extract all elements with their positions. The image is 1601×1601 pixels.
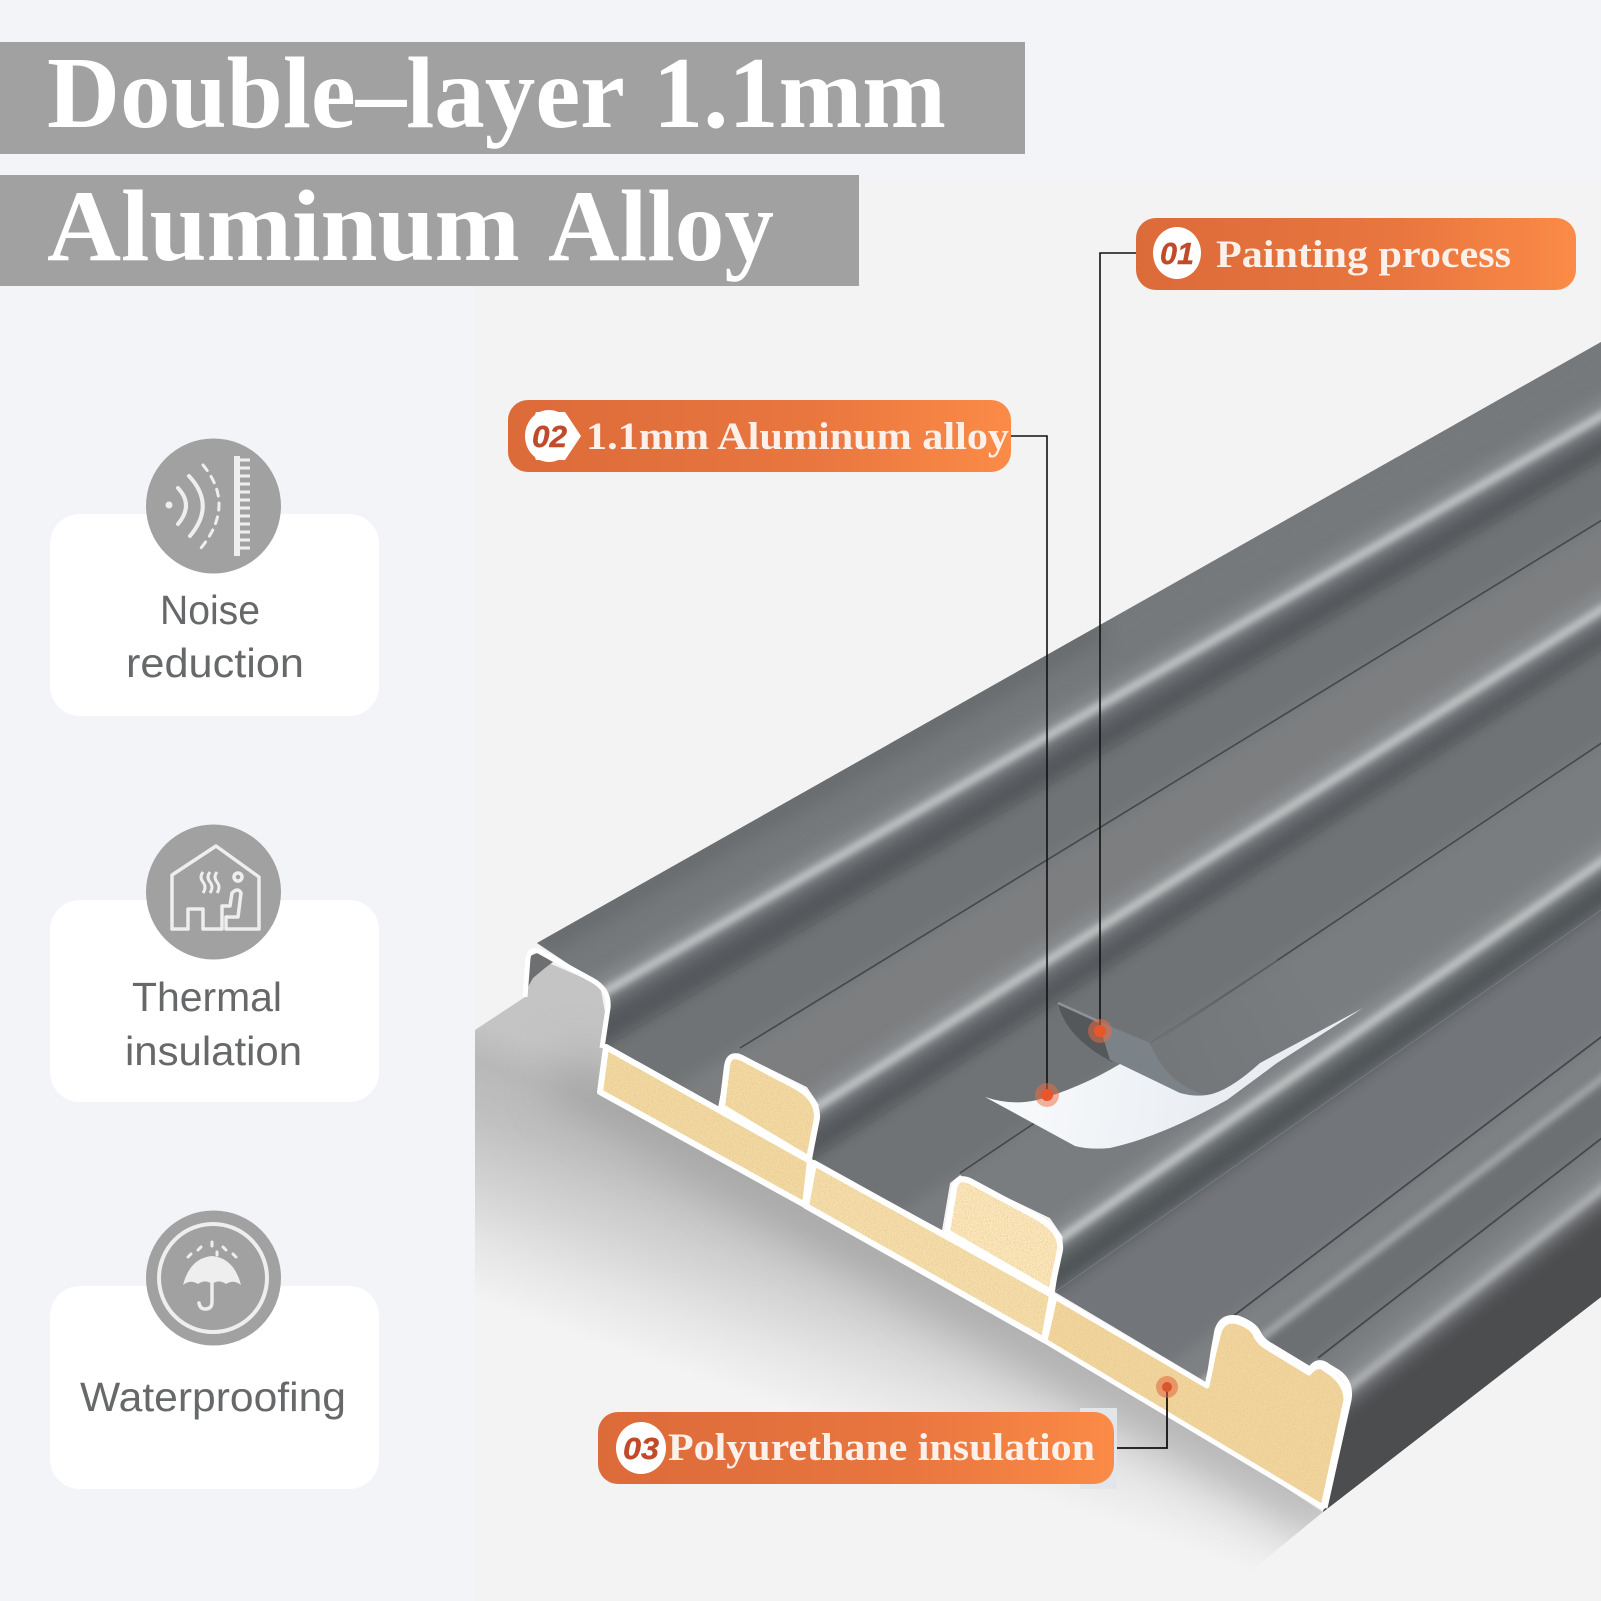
callout 01: painting process: Painting process <box>1216 233 1511 276</box>
surface shading bands <box>537 342 1601 1512</box>
leader line 01 <box>1100 253 1136 1031</box>
caption: thermal insulation <box>125 974 302 1074</box>
peeled paint layer <box>985 960 1363 1149</box>
marker 03 <box>1156 1376 1178 1398</box>
card: noise reduction <box>50 438 379 716</box>
title: second line: Aluminum <box>47 170 520 283</box>
callout 01: painting process: 01 <box>1160 236 1194 271</box>
icon: umbrella in rain <box>159 1224 267 1332</box>
seam lines <box>740 520 1601 1359</box>
curl: painted surface <box>1150 960 1363 1095</box>
marker 02 <box>1035 1083 1059 1107</box>
panel: metal roof surface <box>537 342 1601 1512</box>
icon: heated house <box>172 846 259 929</box>
callout 02: aluminum alloy: 02 <box>532 419 567 454</box>
leader line 02 <box>1011 436 1047 1095</box>
caption: thermal insulation: insulation <box>125 1028 302 1074</box>
callout 02: aluminum alloy <box>508 400 1011 472</box>
title: second line <box>0 170 859 286</box>
curl: grey underside <box>1098 1021 1207 1096</box>
caption: noise reduction: Noise <box>160 587 260 633</box>
peel: bare white aluminium <box>985 1008 1363 1149</box>
white lip and facing <box>525 950 1350 1508</box>
curl: dark underside wedge <box>1058 1003 1125 1062</box>
ridge highlights <box>602 408 1601 1394</box>
caption: thermal insulation: Thermal <box>132 974 282 1020</box>
marker 01 <box>1088 1019 1112 1043</box>
panel: lip underside <box>528 953 553 987</box>
curl: pale top edge <box>1058 1003 1100 1022</box>
foam core white outlines <box>600 1047 1346 1507</box>
title: first line: Double–layer <box>47 37 625 150</box>
icon: sound waves against wall <box>166 456 250 556</box>
card: thermal insulation <box>50 824 379 1102</box>
callout 01: painting process <box>1136 218 1576 290</box>
curl: edge crease <box>1150 960 1277 1043</box>
title: second line: Alloy <box>548 170 774 283</box>
card: waterproofing <box>50 1210 379 1489</box>
caption: noise reduction: reduction <box>126 640 304 686</box>
broad ridge glow <box>596 398 1601 1412</box>
panel cross-section: white facings and foam core <box>525 950 1350 1508</box>
callout 03: polyurethane insulation <box>598 1408 1117 1489</box>
title: first line <box>0 37 1025 154</box>
callout 02: aluminum alloy: 1.1mm Aluminum alloy <box>586 415 1010 458</box>
caption: waterproofing: Waterproofing <box>80 1374 346 1420</box>
back edge shade <box>537 625 1100 943</box>
foam core fills with grain <box>600 1047 1346 1507</box>
callout 03: polyurethane insulation: Polyurethane insulation <box>668 1426 1095 1469</box>
leader line 03 <box>1115 1387 1167 1448</box>
callout 03: polyurethane insulation: 03 <box>623 1431 659 1466</box>
caption: noise reduction <box>126 587 304 686</box>
panel shadow <box>475 955 1340 1590</box>
title: first line: 1.1mm <box>653 37 946 150</box>
